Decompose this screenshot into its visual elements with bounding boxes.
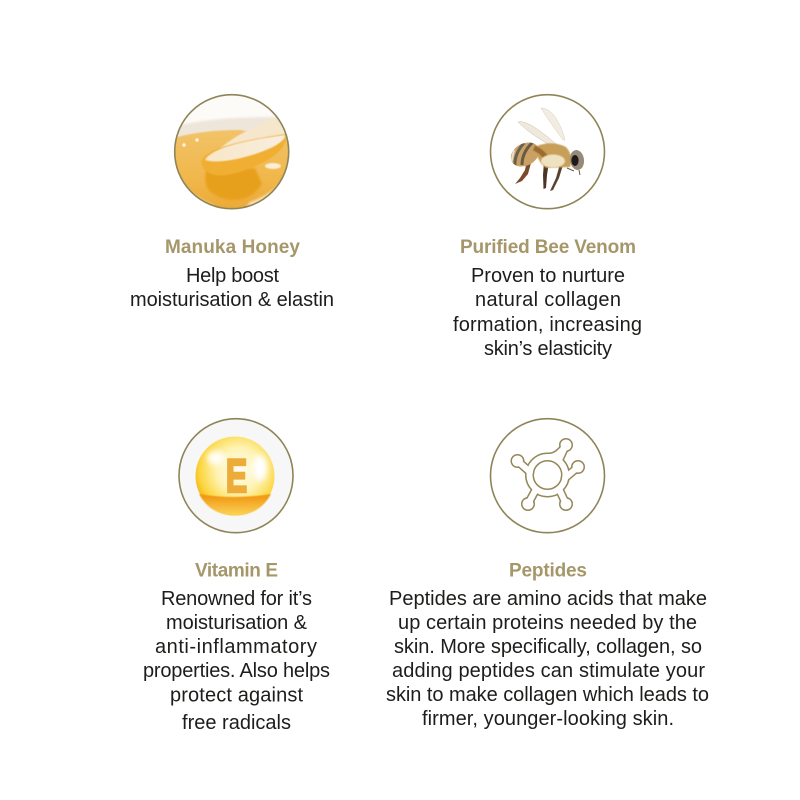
- text: Manuka Honey description: moisturisation & elastin: [130, 289, 334, 311]
- text: Vitamin E description: anti-inflammatory: [155, 636, 317, 658]
- panel: Manuka Honey: [130, 90, 334, 311]
- text: Vitamin E description: [143, 588, 330, 734]
- text: Vitamin E description: properties. Also helps: [143, 660, 330, 682]
- panel: Peptides: [386, 419, 709, 730]
- text: Purified Bee Venom description: formation, increasing: [453, 314, 642, 336]
- text: Purified Bee Venom description: natural collagen: [475, 289, 621, 311]
- text: Manuka Honey description: [130, 265, 334, 311]
- icon: peptide molecule: [490, 419, 604, 533]
- text: Vitamin E description: protect against: [170, 684, 303, 706]
- panel: Vitamin E: [143, 419, 330, 734]
- panel: Purified Bee Venom: [453, 95, 642, 360]
- icon: honey on a spoon: [174, 94, 290, 210]
- text: Peptides description: skin to make collagen which leads to: [386, 684, 709, 706]
- text: Purified Bee Venom description: skin’s elasticity: [484, 338, 612, 360]
- icon letter: E: E: [226, 450, 247, 503]
- text: Peptides description: adding peptides can stimulate your: [392, 660, 705, 682]
- text: Vitamin E description: moisturisation &: [166, 612, 308, 634]
- text: Peptides description: skin. More specifically, collagen, so: [394, 636, 702, 658]
- text: Vitamin E description: free radicals: [182, 712, 291, 734]
- heading: Peptides: Peptides: [509, 560, 587, 582]
- icon: bee: [490, 95, 604, 209]
- heading: Purified Bee Venom: Purified Bee Venom: [460, 237, 636, 258]
- text: Peptides description: [386, 588, 709, 730]
- heading: Manuka Honey: Manuka Honey: [165, 237, 300, 258]
- icon: vitamin E capsule: [179, 419, 293, 533]
- text: Peptides description: up certain proteins needed by the: [398, 612, 697, 634]
- text: Purified Bee Venom description: Proven to nurture: [471, 265, 625, 287]
- text: Peptides description: Peptides are amino acids that make: [389, 588, 707, 610]
- heading: Vitamin E: Vitamin E: [195, 560, 278, 582]
- text: Peptides description: firmer, younger-looking skin.: [422, 708, 674, 730]
- text: Manuka Honey description: Help boost: [186, 265, 279, 287]
- text: Purified Bee Venom description: [453, 265, 642, 360]
- text: Vitamin E description: Renowned for it’s: [161, 588, 312, 610]
